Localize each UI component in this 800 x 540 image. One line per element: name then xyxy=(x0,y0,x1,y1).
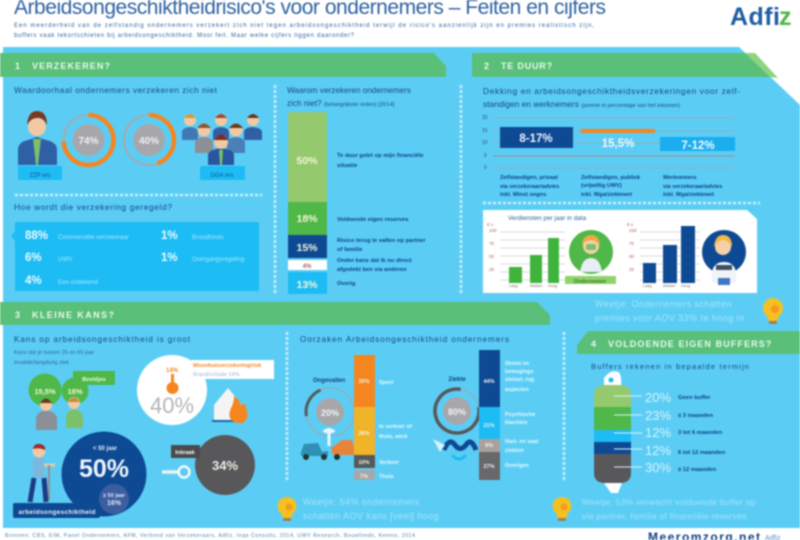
icon: woman in green circle: Ondernemer xyxy=(574,279,607,285)
labels: buffer percentages: ≥ 12 maanden xyxy=(678,467,717,473)
panel: te duur xyxy=(482,86,757,293)
table: verzekering geregeld: 4% xyxy=(25,275,42,287)
labels: buffer percentages: Geen buffer xyxy=(678,395,711,401)
stacked bar: ziekte: 9% xyxy=(485,443,493,449)
stacked bar: reasons: 18% xyxy=(296,213,318,225)
labels: ziekte: klachten xyxy=(505,420,528,426)
donut: ongevallen 20%: Ongevallen xyxy=(313,378,346,384)
panel: kleine kans xyxy=(13,335,274,518)
bar chart: blue xyxy=(627,222,700,288)
stacked bar: reasons: 15% xyxy=(296,242,318,254)
tip: premies te hoog: Weetje: Ondernemers schatten xyxy=(595,299,732,309)
intro text: Een meerderheid van de zelfstandig ondernemers verzekert zich niet tegen arbeidsongeschiktheid terwijl de risico's aanzienlijk zijn en premies realistisch zijn, xyxy=(14,23,594,29)
intro text: buffers vaak tekortschieten bij arbeidsongeschiktheid. Mooi feit. Maar welke cijfers liggen daaronder? xyxy=(14,33,355,39)
tip: premies te hoog xyxy=(595,299,745,323)
heading: kans: invalide/langdurig ziek xyxy=(14,360,69,366)
stat: 50% blue circle xyxy=(62,432,146,516)
icon: thermometer circle 40% xyxy=(137,355,207,425)
label: zzp: ZZP ers xyxy=(29,173,51,179)
labels: ongevallen: Sport xyxy=(379,380,394,386)
labels: ziekte: bewegings xyxy=(505,369,533,375)
stacked bar: ziekte xyxy=(479,350,500,480)
labels: reasons: Onder kans dat ik nu direct xyxy=(337,258,412,264)
labels: premies: (vrijwillig UWV) xyxy=(581,183,622,189)
stat: 50% blue circle: < 50 jaar xyxy=(93,446,118,452)
labels: buffer percentages xyxy=(645,390,726,475)
labels: reasons: afgedekt ben via anderen xyxy=(337,267,407,273)
logo: Adfiz: Adfi xyxy=(730,3,780,31)
table: verzekering geregeld: Commerciële verzekeraar xyxy=(58,234,129,241)
donut: 74% xyxy=(64,115,114,165)
stacked bar: ongevallen: 10% xyxy=(358,460,370,466)
stat: 50% blue circle: 16% xyxy=(107,500,122,507)
icon: waves xyxy=(433,439,476,459)
heading band 2: TE DUUR? xyxy=(501,61,553,71)
panel: verzekeren left xyxy=(11,85,262,291)
labels: reasons: Risico terug te vallen op partner xyxy=(337,238,426,244)
donut: 74%: 74% xyxy=(78,136,99,147)
labels: ziekte: stelsel, rug xyxy=(505,377,534,383)
bar chart: green: Laag xyxy=(509,284,517,288)
label: brandverzekering: Woonhuisverzekering/risk xyxy=(193,363,262,369)
labels: buffer percentages: 30% xyxy=(645,460,671,475)
labels: ongevallen: In verkeer of xyxy=(379,424,412,430)
bar chart: green: Midden xyxy=(530,284,542,288)
stat: man en vrouw: 18% xyxy=(67,387,83,396)
stacked bar: ongevallen: 7% xyxy=(360,474,368,480)
heading band 4: 4 xyxy=(591,339,596,349)
icon: man in blue circle xyxy=(702,230,746,285)
chart: premies: 15 xyxy=(482,128,488,134)
stacked bar: ongevallen xyxy=(354,355,375,480)
icon: light bulb 3 xyxy=(553,497,571,521)
stacked bar: ziekte: 21% xyxy=(483,423,495,429)
labels: premies: Werknemers xyxy=(663,175,696,181)
stacked bar: reasons: 13% xyxy=(296,279,318,291)
bar chart: green: 100 xyxy=(489,228,497,233)
bar chart: blue: Hoog xyxy=(681,284,690,288)
labels: reasons xyxy=(337,153,426,287)
heading: kans: Kans op arbeidsongeschiktheid is groot xyxy=(14,335,191,344)
labels: buffer percentages: 20% xyxy=(645,390,671,405)
table: verzekering geregeld: 88% xyxy=(25,230,48,242)
donut: ziekte 80%: 80% xyxy=(448,407,466,417)
bar chart: blue: Midden xyxy=(663,284,675,288)
heading band 2 xyxy=(472,53,778,78)
chart: premies: 7-12% xyxy=(681,140,715,152)
chart: premies: 20 xyxy=(482,115,488,121)
icon: thermometer circle 40%: 40% xyxy=(150,393,194,418)
heading band 1: 1 xyxy=(15,61,21,71)
stacked bar: ongevallen: 28% xyxy=(358,431,370,437)
stat: 34% grey circle xyxy=(171,435,255,495)
bar chart: blue: 25 xyxy=(629,267,635,272)
chart: premies: 10 xyxy=(482,140,488,146)
heading band 3 xyxy=(0,302,550,325)
labels: premies: inkl. Wga/ziektewet xyxy=(581,192,632,198)
labels: ongevallen xyxy=(379,380,412,480)
donut: 40% xyxy=(124,115,174,165)
labels: buffer percentages: 6 tot 12 maanden xyxy=(678,450,726,456)
label: arbeidsongeschiktheid xyxy=(13,503,100,518)
card: verdiensten xyxy=(483,210,757,293)
labels: ziekte: Skelet en xyxy=(505,361,530,367)
bar chart: green: € x xyxy=(487,222,494,227)
panel: oorzaken xyxy=(300,335,538,480)
stat: 50% blue circle: 50% xyxy=(79,455,129,483)
heading band 4: VOLDOENDE EIGEN BUFFERS? xyxy=(608,339,772,349)
heading band 1 xyxy=(0,53,446,77)
bar chart: green: 75 xyxy=(489,241,495,246)
labels: ziekte: Overigen xyxy=(505,463,529,469)
heading band 3: KLEINE KANS? xyxy=(32,310,115,320)
table: verzekering geregeld: 1% xyxy=(161,230,178,242)
icon: car crash xyxy=(301,428,354,460)
tip: buffers: Weetje: 53% verwacht voldoende buffer op xyxy=(582,497,756,507)
labels: reasons: of familie xyxy=(337,247,363,253)
tip: kans te hoog: Weetje: 54% ondernemers xyxy=(303,497,420,507)
donut: ongevallen 20% xyxy=(302,378,358,440)
labels: ziekte: Hart- en vaat xyxy=(505,439,538,445)
heading: kans: Kans dat je tussen 25 en 65 jaar xyxy=(14,350,94,356)
intro text xyxy=(14,23,594,39)
heading: te duur xyxy=(483,86,740,109)
stacked bar: reasons: 4% xyxy=(303,264,312,270)
chart: premies: 5 xyxy=(484,153,487,159)
bar chart: green xyxy=(487,222,565,288)
icon: key xyxy=(162,466,190,478)
heading: te duur: Dekking en arbeidsongeschiktheidsverzekeringen voor zelf- xyxy=(483,86,740,96)
labels: premies: inkl. Wga/ziektewet xyxy=(663,192,714,198)
bar chart: green: 50 xyxy=(489,254,495,259)
stacked bar: reasons xyxy=(288,112,327,294)
bar chart: blue: 75 xyxy=(629,241,635,246)
table: verzekering geregeld xyxy=(11,222,259,291)
bar chart: green: Hoog xyxy=(548,284,557,288)
labels: buffer percentages: 12% xyxy=(645,443,671,458)
labels: premies: via verzekeraar/advies xyxy=(663,184,722,190)
labels: buffer percentages: ≤ 3 maanden xyxy=(678,413,714,419)
bar chart: blue: Laag xyxy=(643,284,651,288)
icon: group of entrepreneurs xyxy=(182,114,262,165)
label: brandverzekering: Brand/schade 14% xyxy=(193,372,240,378)
table: verzekering geregeld: Een onbekend xyxy=(58,279,98,286)
heading: oorzaken: Oorzaken Arbeidsongeschiktheid ondernemers xyxy=(300,335,509,344)
footer sources: Bronnen: CBS, EIM, Panel Ondernemers, AFM, Verbond van Verzekeraars, Adfiz, Inqa Consults, 2014, UWV Research, Bouwfonds, Kennis, 2014 xyxy=(5,533,415,539)
table: verzekering geregeld: UWV xyxy=(58,256,73,263)
icon: thermometer circle 40%: 14% xyxy=(166,368,179,374)
stat: 34% grey circle: 34% xyxy=(212,458,238,473)
labels: ziekte: aspecten xyxy=(505,387,529,393)
stacked bar: ongevallen: 35% xyxy=(358,379,370,385)
icon: woman in green circle xyxy=(565,230,616,285)
table: verzekering geregeld: Broodfonds xyxy=(192,234,224,241)
heading: redenen: Waarom verzekeren ondernemers xyxy=(287,86,411,95)
chart: premies xyxy=(482,115,735,171)
tip: buffers xyxy=(582,497,756,521)
labels: premies: inkl. Winst ongev. xyxy=(500,192,548,198)
heading: redenen xyxy=(287,86,411,108)
stacked bar: ziekte: 27% xyxy=(483,464,495,470)
stat: 34% grey circle: Inbraak xyxy=(175,450,196,456)
labels: premies xyxy=(500,175,722,198)
icon: house on fire xyxy=(212,388,247,423)
heading: te duur: standigen en werknemers (premie in percentage van het inkomen) xyxy=(483,99,680,109)
chart: waarom verzekeren niet xyxy=(287,86,426,294)
chart: premies: 15,5% xyxy=(602,138,634,150)
dotted dividers xyxy=(15,85,760,482)
tip: premies te hoog: premies voor AOV 33% te hoog in xyxy=(595,313,745,323)
tip: kans te hoog: schatten AOV kans [veel] hoog xyxy=(303,511,439,521)
heading: redenen: zich niet? (belangrijkste reden) [2014] xyxy=(287,99,395,108)
icon: worker with cane xyxy=(30,444,55,502)
stat: 50% blue circle: ≥ 50 jaar xyxy=(103,493,126,499)
stat: man en vrouw: Beeldjes xyxy=(82,377,106,383)
donut: ziekte 80%: Ziekte xyxy=(448,377,466,383)
label: mkb xyxy=(200,166,245,180)
heading: kans xyxy=(14,335,191,366)
labels: reasons: Te duur gelet op mijn financiële xyxy=(337,153,424,159)
labels: ongevallen: Thuis xyxy=(379,474,394,480)
donut: ziekte 80% xyxy=(432,377,482,436)
stacked bar: reasons: 50% xyxy=(296,155,318,167)
heading band 2: 2 xyxy=(484,61,489,71)
heading: buffers: Buffers rekenen in bepaalde termijn xyxy=(591,362,749,371)
labels: reasons: Voldoende eigen reserves xyxy=(337,217,408,223)
card: verdiensten: Verdiensten per jaar in data xyxy=(508,215,587,222)
bar chart: blue: 50 xyxy=(629,254,635,259)
donut: ongevallen 20%: 20% xyxy=(321,408,339,418)
chart: premies: 8-17% xyxy=(519,133,553,145)
icon: light bulb 1 xyxy=(763,298,783,324)
labels: buffer percentages: 3 tot 6 maanden xyxy=(678,430,723,436)
labels: ziekte: ziekten xyxy=(505,448,524,454)
stat: man en vrouw xyxy=(28,371,115,430)
table: verzekering geregeld: Overgangsregeling xyxy=(192,256,245,263)
heading band 1: VERZEKEREN? xyxy=(32,61,111,71)
donut: 40%: 40% xyxy=(139,136,159,147)
labels: premies: Zelfstandigen, publiek xyxy=(581,175,641,181)
chart: premies: 0 xyxy=(484,165,487,171)
labels: ziekte xyxy=(505,361,538,469)
tip: buffers: via partner, familie of financiële reserves xyxy=(582,511,747,521)
chart: buffer fender xyxy=(594,371,642,493)
labels: buffer percentages: 12% xyxy=(645,425,671,440)
label: zzp xyxy=(18,166,62,180)
panel: eigen buffers xyxy=(591,362,749,493)
icon: light bulb 2 xyxy=(278,497,296,521)
labels: ongevallen: thuis, werk xyxy=(379,434,409,440)
label: brandverzekering xyxy=(191,360,274,379)
logo: Adfiz: z xyxy=(779,3,792,31)
labels: buffer percentages: 23% xyxy=(645,408,671,423)
stat: man en vrouw: 15,5% xyxy=(34,387,56,396)
labels: ziekte: Psychische xyxy=(505,412,535,418)
heading: hoe geregeld: Hoe wordt die verzekering geregeld? xyxy=(14,202,172,212)
labels: premies: via verzekeraar/advies xyxy=(500,184,559,190)
labels: reasons: Overig xyxy=(337,281,356,287)
heading: waarom niet verzekeren: Waardoorhaal ondernemers verzekeren zich niet xyxy=(14,85,218,95)
stacked bar: ziekte: 44% xyxy=(483,379,495,385)
labels: premies: Zelfstandigen, privaat xyxy=(500,175,558,181)
label: mkb: DGA ers xyxy=(211,173,233,179)
heading band 4 xyxy=(577,331,800,354)
bar chart: green: 25 xyxy=(489,267,495,272)
bar chart: blue: € x xyxy=(627,222,634,227)
table: verzekering geregeld: 6% xyxy=(25,252,42,264)
icon: single entrepreneur xyxy=(18,111,57,165)
labels: ongevallen: Verkeer xyxy=(379,460,400,466)
label: arbeidsongeschiktheid: arbeidsongeschiktheid xyxy=(18,509,96,516)
heading band 3: 3 xyxy=(15,310,20,320)
bar chart: blue: 100 xyxy=(629,228,637,233)
tip: kans te hoog xyxy=(303,497,439,521)
table: verzekering geregeld: 1% xyxy=(161,252,178,264)
labels: reasons: situatie xyxy=(337,163,358,169)
